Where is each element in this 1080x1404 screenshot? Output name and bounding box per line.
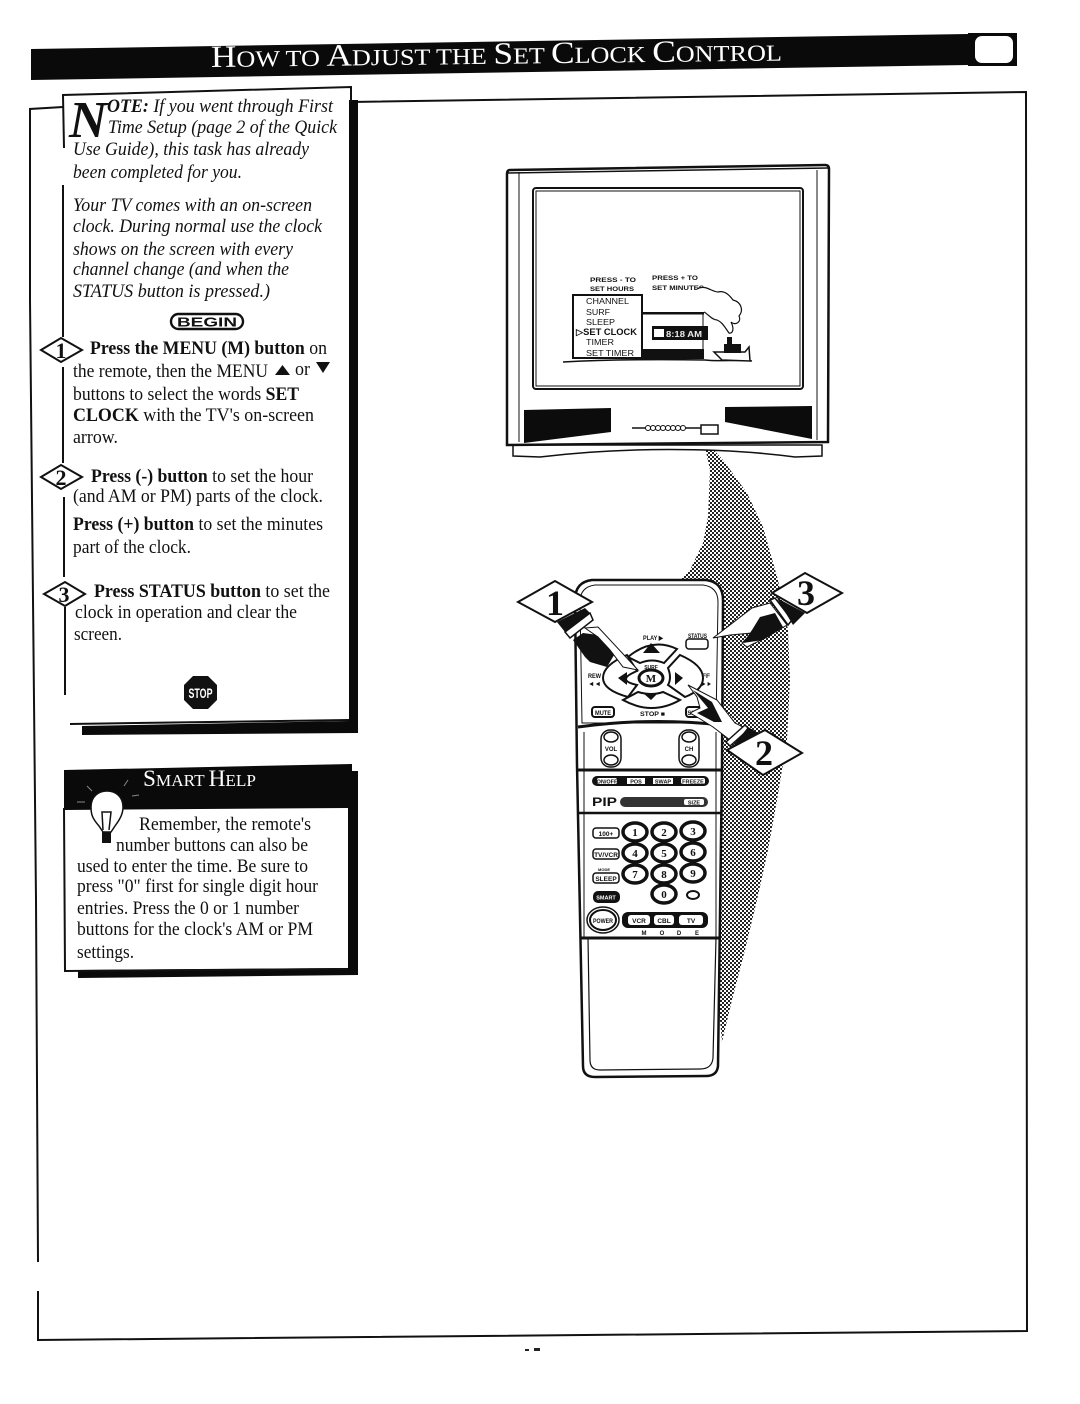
hand pointer 1 — [518, 581, 638, 670]
smart help text — [77, 815, 318, 963]
tv control row — [632, 425, 718, 434]
side keys: 100+ — [599, 831, 614, 838]
on-screen menu: CHANNEL — [586, 296, 629, 306]
side keys — [593, 828, 620, 903]
vol rocker: VOL — [605, 747, 617, 753]
halftone beam from tv to remote — [680, 437, 790, 1042]
begin badge — [171, 314, 243, 330]
step 2 text: (and AM or PM) parts of the clock. — [73, 487, 323, 507]
remote upper labels: STATUS — [688, 633, 707, 640]
on-screen menu: ▷SET CLOCK — [575, 327, 638, 337]
step 3 text: screen. — [74, 625, 122, 645]
hand pointer 3: 3 — [797, 573, 815, 613]
begin badge: BEGIN — [177, 314, 237, 330]
icon: stop sign — [184, 676, 217, 709]
smart help text: buttons for the clock's AM or PM — [77, 920, 313, 940]
mode bar and power button: M — [642, 931, 646, 937]
ch rocker: CH — [685, 747, 693, 753]
on-screen captions: PRESS + TO — [652, 275, 698, 282]
mode bar and power button: POWER — [593, 919, 614, 925]
step 3 text: Press STATUS button to set the — [94, 582, 330, 602]
remote upper labels: PLAY ▶ — [643, 635, 664, 642]
note text: channel change (and when the — [73, 260, 289, 280]
number keypad: 8 — [661, 869, 667, 881]
pip button strip: ON/OFF — [597, 780, 618, 786]
step 1 diamond: 1 — [56, 338, 66, 363]
step 1 text: the remote, then the MENU — [73, 362, 268, 382]
d-pad: M — [646, 673, 657, 685]
pip label and slider — [592, 795, 708, 809]
step 1 text: CLOCK with the TV's on-screen — [73, 406, 314, 426]
step 1 text: Press the MENU (M) button on — [90, 339, 327, 359]
title bar: HOW TO ADJUST THE SET CLOCK CONTROL — [211, 33, 782, 74]
remote upper labels: STOP ■ — [640, 711, 665, 718]
number keypad: 1 — [632, 827, 638, 839]
mode bar and power button: CBL — [657, 918, 671, 925]
tv cabinet — [507, 165, 829, 445]
pip button strip: SWAP — [655, 780, 671, 786]
pip button strip: FREEZE — [682, 780, 704, 786]
icon: light bulb — [77, 780, 139, 843]
clock scene: smoke, building, boat: 8:18 AM — [666, 330, 702, 339]
pip label and slider: SIZE — [688, 800, 700, 806]
number keypad: 5 — [661, 848, 667, 860]
page number fragment — [525, 1348, 540, 1351]
on-screen menu: SLEEP — [586, 317, 615, 327]
ch rocker — [679, 730, 699, 767]
tv feet — [513, 445, 822, 457]
step 2 text: part of the clock. — [73, 538, 191, 558]
number keypad: 3 — [690, 826, 696, 838]
speaker left — [524, 408, 611, 443]
on-screen captions — [590, 275, 705, 293]
tv screen — [533, 188, 803, 389]
mode bar and power button: D — [677, 931, 682, 937]
note text: OTE: If you went through First — [107, 97, 334, 117]
note text: STATUS button is pressed.) — [73, 282, 270, 302]
smart help text: number buttons can also be — [116, 836, 308, 856]
number keypad: 2 — [661, 827, 667, 839]
step 2 diamond — [41, 465, 82, 490]
smart help text: entries. Press the 0 or 1 number — [77, 899, 299, 919]
side keys: TV/VCR — [594, 852, 618, 859]
remote upper labels: REW — [588, 674, 601, 680]
status button — [686, 639, 708, 649]
on-screen menu: SET TIMER — [586, 348, 634, 358]
d-pad: SURF — [644, 665, 658, 671]
step 1 text: buttons to select the words SET — [73, 385, 300, 405]
step 3 diamond: 3 — [58, 582, 70, 607]
step 2 text: Press (-) button to set the hour — [91, 467, 313, 487]
step 1 text: arrow. — [73, 428, 118, 448]
step 2 diamond: 2 — [56, 465, 66, 490]
pip size button — [686, 707, 702, 717]
step 2 text — [73, 467, 323, 558]
number keypad: 9 — [690, 868, 696, 880]
note text: shows on the screen with every — [73, 240, 294, 260]
note text: clock. During normal use the clock — [73, 217, 323, 237]
mute button — [592, 707, 614, 717]
smart help text: settings. — [77, 943, 134, 963]
smart help heading: SMART HELP — [143, 766, 256, 791]
hand pointer 1: 1 — [546, 583, 564, 623]
mode bar and power button: E — [695, 931, 699, 937]
hand pointer 3 — [713, 573, 842, 647]
step 1 text — [73, 339, 330, 448]
number keypad: 7 — [632, 869, 638, 881]
mode bar and power button: VCR — [632, 918, 646, 925]
smart help text: Remember, the remote's — [139, 815, 311, 835]
panel: note and steps — [41, 87, 358, 735]
icon: tv screen tab — [968, 33, 1017, 66]
d-pad — [603, 643, 703, 708]
step 3 text: clock in operation and clear the — [75, 603, 297, 623]
on-screen menu: TIMER — [586, 337, 614, 347]
pip size button: SIZE — [687, 711, 701, 717]
step 3 text — [74, 582, 330, 645]
number keypad: 6 — [690, 847, 696, 859]
on-screen captions: PRESS - TO — [590, 277, 636, 284]
remote dividers — [577, 721, 722, 938]
pip button strip — [592, 776, 709, 786]
step 1 diamond — [41, 338, 82, 363]
side keys: MODE — [598, 867, 610, 872]
remote upper labels: FF — [702, 674, 710, 680]
note text — [73, 97, 338, 302]
side keys: SMART — [596, 896, 616, 902]
on-screen menu — [573, 295, 642, 358]
smart help text: used to enter the time. Be sure to — [77, 857, 308, 877]
note text: been completed for you. — [73, 163, 242, 183]
on-screen captions: SET MINUTES — [652, 285, 705, 292]
on-screen menu: SURF — [586, 307, 610, 317]
speaker right — [725, 406, 812, 439]
hand pointer 2: 2 — [755, 733, 773, 773]
vol rocker — [601, 730, 621, 767]
remote upper labels: ►► — [701, 681, 712, 688]
on-screen captions: SET HOURS — [590, 286, 635, 293]
note text: Time Setup (page 2 of the Quick — [108, 118, 338, 138]
side keys: SLEEP — [595, 876, 617, 883]
remote upper labels — [588, 633, 712, 718]
hand pointer 2 — [688, 685, 802, 775]
step 3 diamond — [44, 582, 85, 607]
mode bar and power button — [587, 907, 708, 937]
tv set — [507, 165, 829, 457]
number keypad: 4 — [632, 848, 638, 860]
remote control — [575, 580, 723, 1077]
number keypad: 0 — [661, 889, 667, 901]
clock scene: smoke, building, boat — [563, 287, 752, 362]
pip label and slider: PIP — [592, 795, 617, 809]
smart help text: press "0" first for single digit hour — [77, 877, 318, 897]
title bar — [31, 33, 968, 80]
icon: stop sign: STOP — [188, 685, 212, 701]
number keypad — [623, 822, 705, 903]
remote body — [575, 580, 723, 1077]
pip button strip: POS — [630, 780, 642, 786]
step 1 text: or — [295, 360, 310, 380]
step 2 text: Press (+) button to set the minutes — [73, 515, 323, 535]
mute button: MUTE — [595, 711, 611, 717]
remote upper labels: ◄◄ — [588, 681, 601, 688]
note drop cap: N — [68, 92, 109, 149]
panel: smart help — [64, 764, 358, 978]
note text: Use Guide), this task has already — [73, 140, 310, 160]
mode bar and power button: TV — [687, 918, 696, 925]
note text: Your TV comes with an on-screen — [73, 196, 312, 216]
mode bar and power button: O — [660, 931, 665, 937]
